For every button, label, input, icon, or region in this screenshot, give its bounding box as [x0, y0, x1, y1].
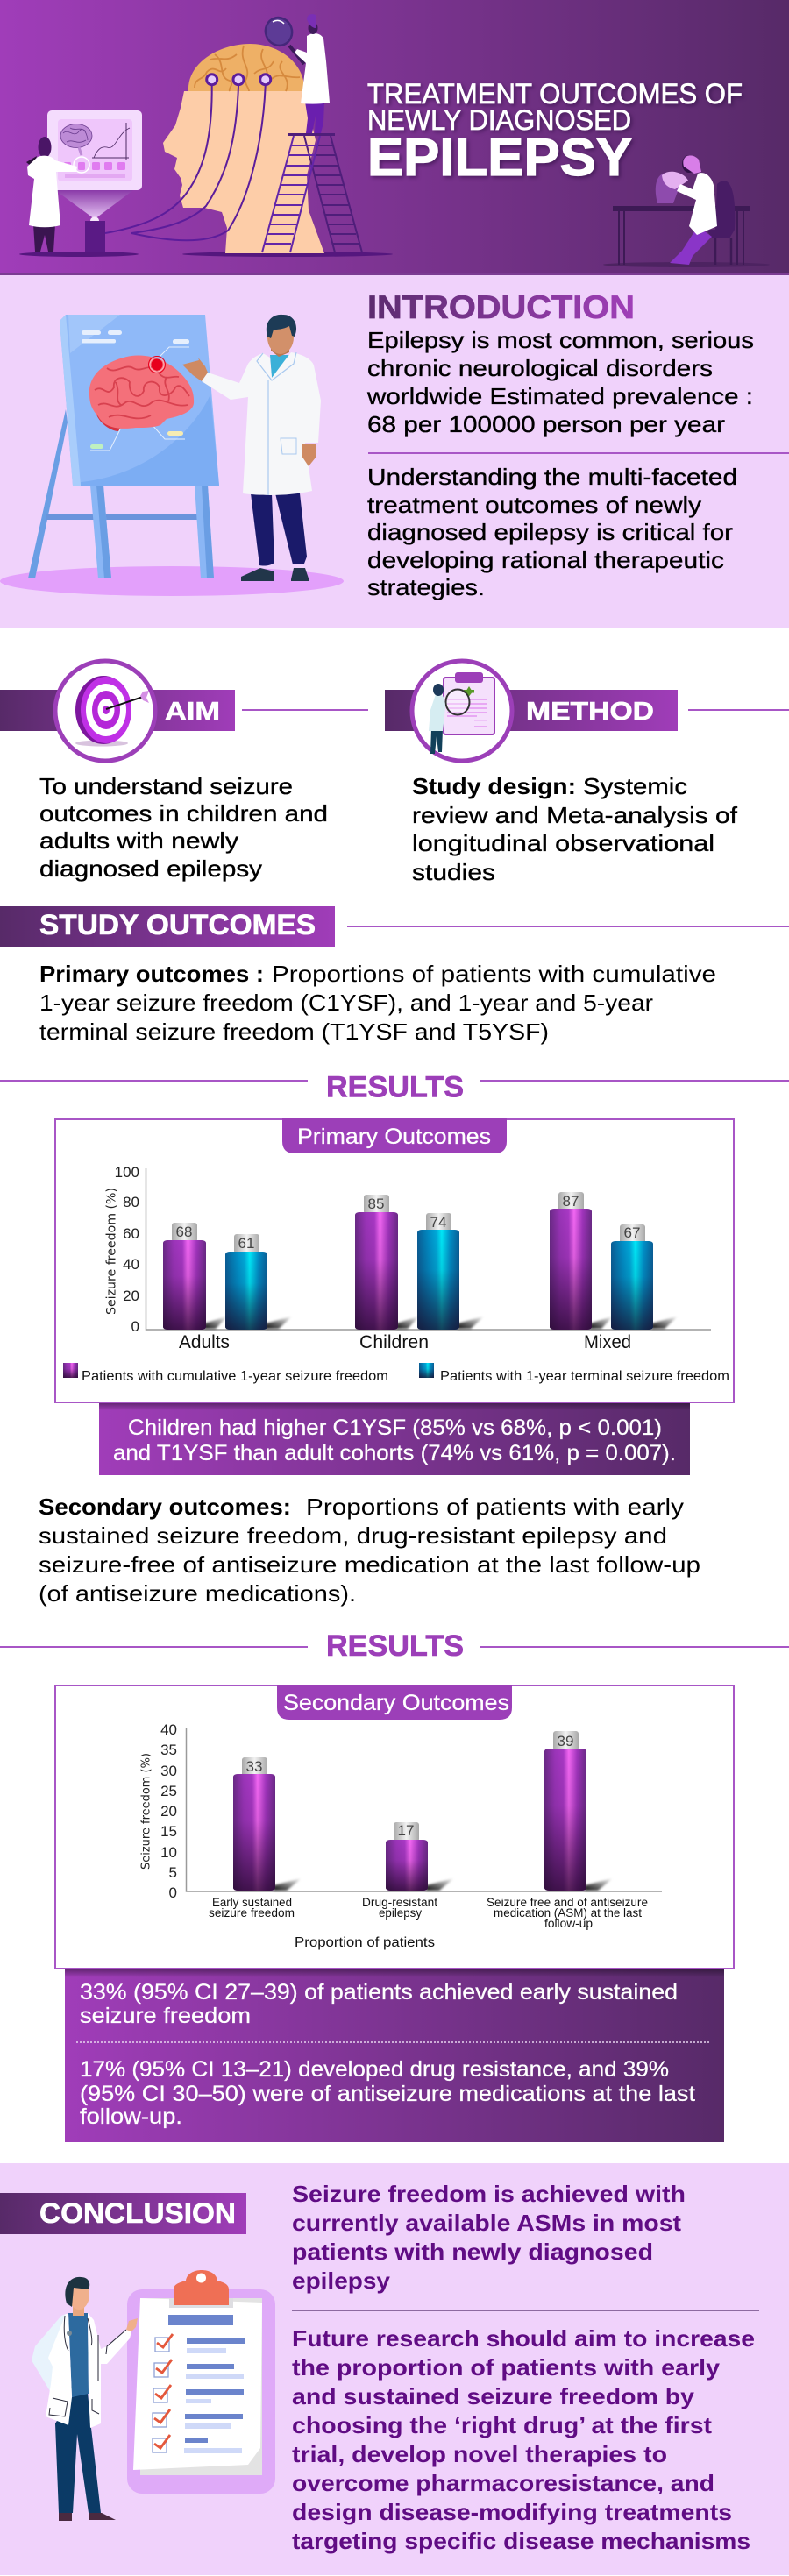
callout: children vs adults [99, 1402, 690, 1475]
text block: secondary outcomes: Proportions of patients with early [306, 1494, 684, 1520]
text block: aim: outcomes in children and [39, 800, 328, 827]
bar chart: seizure freedom by cohort: 0 [132, 1318, 139, 1335]
bar chart: seizure freedom by cohort: Mixed [584, 1332, 631, 1352]
bar chart: seizure freedom by cohort: 80 [123, 1194, 139, 1210]
text block: future research: the proportion of patients with early [292, 2354, 721, 2381]
panel: header banner [0, 0, 789, 275]
bar chart: seizure freedom by cohort: 67 [624, 1224, 640, 1241]
heading: results primary: RESULTS [326, 1071, 464, 1104]
illustration: woman at screen [19, 137, 139, 257]
bar chart: seizure freedom by cohort: 61 [238, 1235, 254, 1252]
bar chart: seizure freedom by cohort: 74 [430, 1214, 446, 1231]
title [367, 78, 743, 187]
callout: secondary findings: (95% CI 30–50) were of antiseizure medications at the last [80, 2082, 695, 2106]
text block: primary outcomes: 1-year seizure freedom (C1YSF), and 1-year and 5-year [39, 990, 653, 1016]
bar chart: secondary outcomes: 30 [160, 1763, 177, 1779]
text block: future research: Future research should aim to increase [292, 2325, 755, 2352]
heading: method: METHOD [526, 698, 654, 726]
panel: aim [0, 661, 368, 882]
text block: epilepsy prevalence: worldwide Estimated prevalence : [366, 383, 753, 409]
text block: secondary outcomes: sustained seizure freedom, drug-resistant epilepsy and [39, 1522, 667, 1549]
text block: study design: Systemic [583, 773, 687, 799]
callout: secondary findings: 17% (95% CI 13–21) developed drug resistance, and 39% [80, 2057, 669, 2082]
chart legend: Patients with 1-year terminal seizure freedom [440, 1369, 729, 1384]
text block: future research: and sustained seizure freedom by [292, 2383, 695, 2409]
text block: aim: To understand seizure [39, 773, 293, 799]
callout: secondary findings: seizure freedom [80, 2004, 251, 2028]
text block: seizure freedom conclusion: Seizure freedom is achieved with [292, 2181, 686, 2207]
text block: future research: design disease-modifying treatments [292, 2499, 732, 2525]
text block: seizure freedom conclusion [292, 2181, 686, 2294]
illustration: clipboard checklist [127, 2270, 275, 2494]
bar chart: secondary outcomes: 39 [558, 1733, 573, 1749]
bar chart: seizure freedom by cohort: Children [359, 1332, 429, 1352]
bar chart: seizure freedom by cohort: 60 [123, 1225, 139, 1242]
text block: secondary outcomes [39, 1494, 700, 1607]
bar chart: secondary outcomes: 33 [246, 1758, 262, 1775]
text block: study design: studies [412, 859, 495, 885]
title: TREATMENT OUTCOMES OF [367, 78, 743, 110]
chart legend [63, 1363, 729, 1384]
callout: secondary findings: 33% (95% CI 27–39) of patients achieved early sustained [80, 1980, 678, 2005]
text block: secondary outcomes: (of antiseizure medications). [39, 1580, 356, 1607]
icon: clipboard with researcher [412, 661, 512, 761]
heading: results secondary: RESULTS [326, 1629, 464, 1663]
text block: aim [39, 773, 328, 882]
chart title tab: Primary Outcomes [297, 1125, 491, 1149]
text block: primary outcomes: Proportions of patients with cumulative [272, 961, 716, 987]
heading: conclusion [0, 2193, 246, 2234]
callout: secondary findings [65, 1969, 724, 2142]
bar chart: secondary outcomes: epilepsy [379, 1906, 422, 1920]
text block: epilepsy prevalence: 68 per 100000 person per year [367, 411, 725, 437]
bar chart: seizure freedom by cohort: 20 [123, 1288, 139, 1304]
illustration: projected brain screen [47, 110, 142, 252]
bar chart: secondary outcomes: 0 [169, 1884, 177, 1901]
panel: secondary outcomes chart [55, 1685, 734, 2142]
panel: primary outcomes chart [55, 1118, 734, 1475]
bar chart: secondary outcomes: medication (ASM) at the last [494, 1906, 642, 1920]
bar chart: secondary outcomes: follow-up [544, 1917, 593, 1930]
bar chart: secondary outcomes: 20 [160, 1803, 177, 1820]
title: NEWLY DIAGNOSED [367, 104, 631, 136]
bar chart: seizure freedom by cohort: 68 [176, 1224, 192, 1240]
bar chart: secondary outcomes: Seizure free and of antiseizure [487, 1896, 648, 1909]
bar chart: secondary outcomes: 15 [160, 1823, 177, 1840]
bar chart: seizure freedom by cohort: 40 [123, 1256, 139, 1273]
text block: secondary outcomes: Secondary outcomes: [39, 1494, 291, 1520]
illustration: doctor with stethoscope [32, 2277, 138, 2521]
text block: understanding treatment outcomes: strategies. [367, 574, 485, 600]
text block: secondary outcomes: seizure-free of antiseizure medication at the last follow-up [39, 1551, 700, 1578]
heading: aim: AIM [165, 698, 220, 726]
chart legend: Patients with cumulative 1-year seizure freedom [82, 1369, 388, 1384]
panel: conclusion [0, 2163, 789, 2575]
bar chart: secondary outcomes: 17 [398, 1822, 414, 1839]
bar chart: secondary outcomes: 40 [160, 1721, 177, 1738]
bar chart: seizure freedom by cohort: 100 [115, 1164, 139, 1181]
bar chart: secondary outcomes: 10 [160, 1844, 177, 1861]
text block: seizure freedom conclusion: epilepsy [292, 2267, 391, 2294]
bar chart: seizure freedom by cohort: Seizure freedom (%) [105, 1188, 119, 1315]
text block: understanding treatment outcomes [367, 464, 737, 600]
text block: understanding treatment outcomes: Understanding the multi-faceted [367, 464, 737, 490]
text block: aim: diagnosed epilepsy [39, 855, 262, 882]
illustration: doctor presenting brain on board [0, 315, 344, 596]
bar chart: secondary outcomes: seizure freedom [209, 1906, 295, 1920]
text block: future research [292, 2325, 755, 2554]
text block: primary outcomes: Primary outcomes : [39, 961, 264, 987]
bar chart: seizure freedom by cohort: 87 [563, 1193, 579, 1210]
chart title tab: Secondary Outcomes [283, 1691, 509, 1715]
bar chart: secondary outcomes: 5 [169, 1864, 177, 1881]
callout: children vs adults: and T1YSF than adult cohorts (74% vs 61%, p = 0.007). [113, 1441, 676, 1465]
bar chart: seizure freedom by cohort: 85 [368, 1196, 384, 1212]
text block: future research: targeting specific disease mechanisms [292, 2528, 750, 2554]
text block: understanding treatment outcomes: treatment outcomes of newly [367, 492, 701, 518]
bar chart: secondary outcomes: Proportion of patients [295, 1935, 435, 1950]
bar chart: secondary outcomes: 25 [160, 1783, 177, 1799]
text block: future research: overcome pharmacoresistance, and [292, 2470, 714, 2496]
bar chart: secondary outcomes [140, 1721, 662, 1950]
bar chart: seizure freedom by cohort [105, 1164, 711, 1352]
callout: secondary findings: follow-up. [80, 2104, 182, 2129]
text block: study design: Study design: [412, 773, 576, 799]
chart title tab [277, 1685, 512, 1720]
heading: study outcomes: STUDY OUTCOMES [39, 909, 316, 940]
text block: study design: longitudinal observational [412, 830, 714, 856]
chart title tab [282, 1118, 507, 1153]
text block: future research: trial, develop novel therapies to [292, 2441, 667, 2467]
bar chart: secondary outcomes: 35 [160, 1742, 177, 1758]
panel: study outcomes [0, 906, 789, 1045]
callout: children vs adults: Children had higher C1YSF (85% vs 68%, p < 0.001) [128, 1416, 662, 1440]
bar chart: secondary outcomes: Early sustained [212, 1896, 292, 1909]
text block: study design [412, 773, 738, 885]
illustration: microscope desk scientist [603, 155, 770, 267]
panel: introduction [0, 275, 789, 628]
title: EPILEPSY [367, 128, 632, 187]
text block: seizure freedom conclusion: patients with newly diagnosed [292, 2239, 653, 2265]
panel: method [385, 661, 789, 885]
heading: introduction: INTRODUCTION [367, 289, 635, 325]
heading: conclusion: CONCLUSION [39, 2197, 236, 2229]
text block: primary outcomes: terminal seizure freedom (T1YSF and T5YSF) [39, 1018, 549, 1045]
bar chart: seizure freedom by cohort: Adults [179, 1332, 230, 1352]
bar chart: secondary outcomes: Drug-resistant [362, 1896, 437, 1909]
illustration: ladder with scientist and magnifier [261, 14, 362, 252]
text block: primary outcomes [39, 961, 716, 1045]
text block: study design: review and Meta-analysis of [412, 802, 738, 828]
text block: aim: adults with newly [39, 827, 238, 854]
icon: target with arrow [55, 661, 155, 761]
text block: seizure freedom conclusion: currently available ASMs in most [292, 2210, 681, 2236]
text block: understanding treatment outcomes: developing rational therapeutic [367, 547, 724, 573]
illustration: head with brain and electrodes [105, 44, 393, 257]
bar chart: secondary outcomes: Seizure freedom (%) [140, 1753, 153, 1870]
text block: future research: choosing the ‘right drug’ at the first [292, 2412, 712, 2438]
text block: epilepsy prevalence: Epilepsy is most common, serious [367, 327, 754, 353]
text block: understanding treatment outcomes: diagnosed epilepsy is critical for [367, 519, 733, 545]
text block: epilepsy prevalence: chronic neurological disorders [367, 355, 713, 381]
text block: epilepsy prevalence [366, 327, 754, 437]
